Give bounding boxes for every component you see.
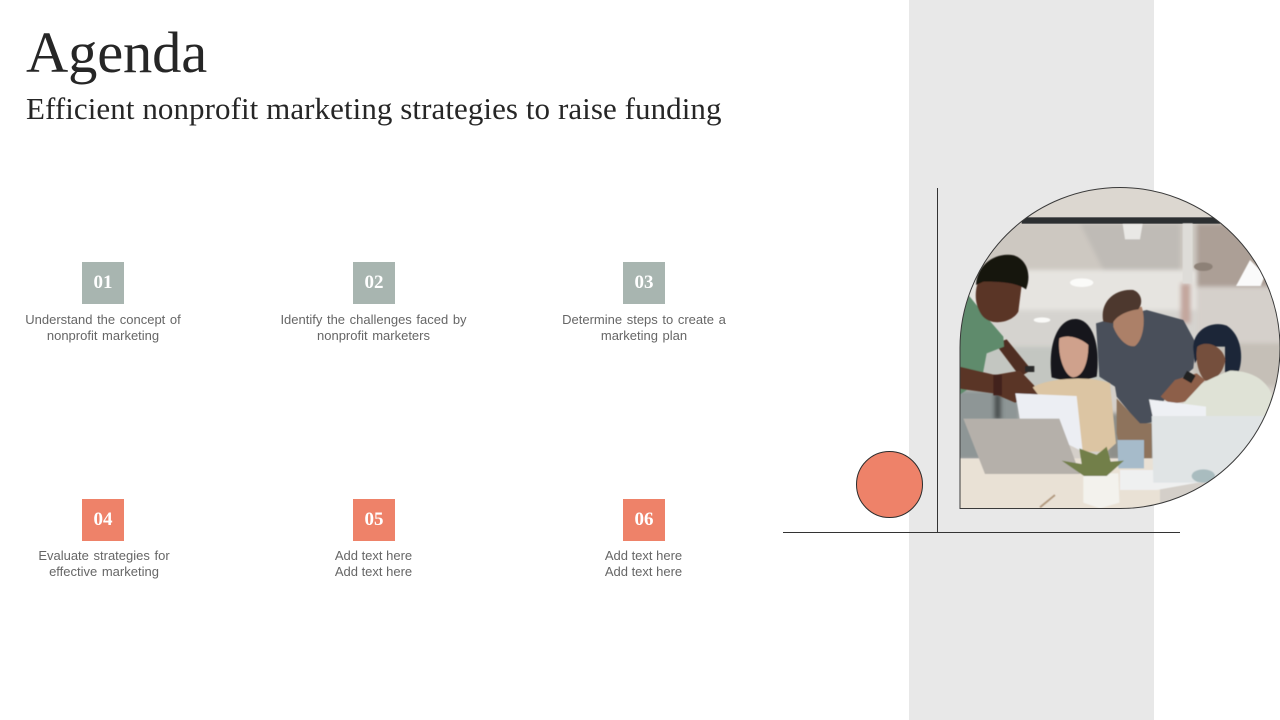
agenda item 04: Evaluate strategies for bbox=[38, 548, 170, 563]
agenda item 03: marketing plan bbox=[601, 328, 687, 343]
coral circle bbox=[856, 452, 922, 518]
agenda item 05: Add text here bbox=[335, 564, 412, 579]
grey vertical band bbox=[909, 0, 1154, 720]
man in green bbox=[995, 339, 1032, 377]
agenda item 04 bbox=[38, 499, 170, 579]
agenda item 05: Add text here bbox=[335, 548, 412, 563]
agenda item 02: Identify the challenges faced by bbox=[280, 312, 467, 327]
agenda item 01 bbox=[25, 262, 181, 343]
agenda item 04: 04 bbox=[94, 509, 112, 530]
agenda item 04: effective marketing bbox=[49, 564, 159, 579]
agenda item 01: 01 bbox=[94, 272, 112, 293]
agenda item 02: nonprofit marketers bbox=[317, 328, 430, 343]
man in plaid bbox=[1096, 310, 1196, 425]
agenda item 05: 05 bbox=[364, 509, 384, 530]
agenda item 03 bbox=[562, 262, 726, 343]
foreground table and objects bbox=[957, 458, 1160, 513]
agenda item 01: nonprofit marketing bbox=[47, 328, 159, 343]
axis lines bbox=[783, 188, 1180, 532]
agenda item 06: Add text here bbox=[605, 564, 682, 579]
agenda item 03: 03 bbox=[634, 272, 654, 293]
woman with head wrap bbox=[1193, 324, 1241, 373]
agenda item 06: 06 bbox=[634, 509, 654, 530]
agenda item 05 bbox=[335, 499, 412, 579]
agenda item 03: Determine steps to create a bbox=[562, 312, 726, 327]
photo of team at work bbox=[957, 185, 1280, 513]
agenda item 02: 02 bbox=[364, 272, 384, 293]
title: Agenda bbox=[26, 20, 207, 85]
agenda item 02 bbox=[280, 262, 467, 343]
photo outline bbox=[960, 188, 1280, 508]
agenda item 06: Add text here bbox=[605, 548, 682, 563]
subtitle: Efficient nonprofit marketing strategies to raise funding bbox=[26, 91, 722, 126]
agenda item 01: Understand the concept of bbox=[25, 312, 181, 327]
decorative graphic with photo bbox=[783, 187, 1280, 533]
woman in stripes bbox=[1051, 319, 1098, 380]
agenda item 06 bbox=[605, 499, 682, 579]
